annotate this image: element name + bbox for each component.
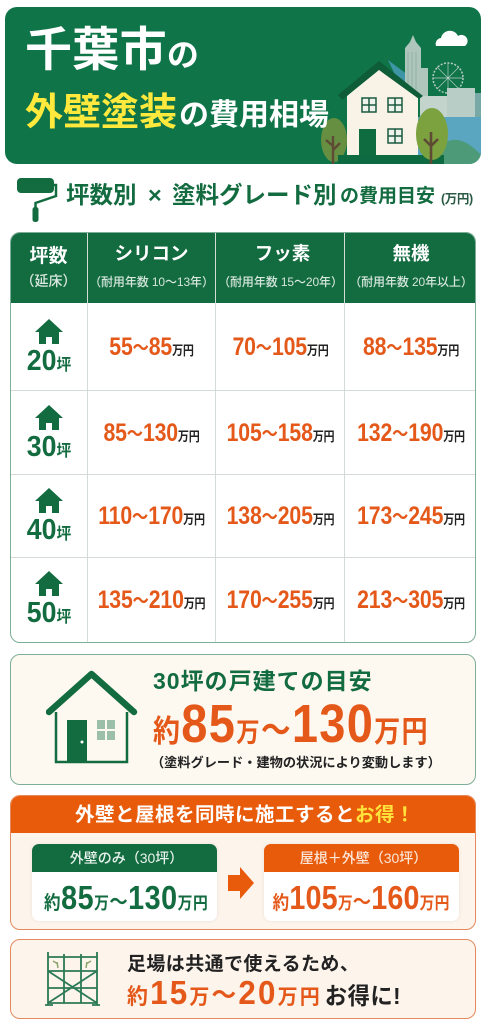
- icon: paint roller: [17, 178, 58, 222]
- card: 屋根+外壁: [264, 844, 459, 921]
- card label: [264, 844, 459, 872]
- column header: シリコン: シリコン: [114, 243, 188, 264]
- card label: [32, 844, 217, 872]
- prices: 50坪: 213～305万円: [357, 586, 465, 614]
- prices: 50坪: 135～210万円: [98, 586, 205, 614]
- section heading: (万円): [441, 192, 473, 206]
- prices: 20坪: 88～135万円: [363, 333, 459, 361]
- icon: house: [46, 670, 138, 764]
- column header: フッ素: [218, 243, 343, 289]
- column header: フッ素: フッ素: [255, 243, 310, 264]
- section heading: 塗料グレード別: [172, 182, 336, 208]
- scaffolding savings: 約15万～20万円お得に!: [127, 974, 401, 1011]
- prices: 40坪: 173～245万円: [357, 502, 465, 530]
- estimate note: （塗料グレード・建物の状況により変動します）: [151, 755, 441, 770]
- card price: 約105万～160万円: [273, 879, 450, 916]
- price table: [10, 232, 476, 643]
- prices: 50坪: [98, 586, 465, 614]
- prices: 40坪: [98, 502, 465, 530]
- prices: 30坪: [103, 419, 465, 447]
- section heading: [66, 182, 473, 208]
- prices: 30坪: 85～130万円: [103, 419, 200, 447]
- section heading: ×: [148, 182, 162, 208]
- prices: 40坪: 110～170万円: [98, 502, 205, 530]
- prices: 20坪: [109, 333, 459, 361]
- icon: scaffolding: [45, 952, 100, 1006]
- card label: 屋根＋外壁（30坪）: [300, 850, 427, 866]
- arrow: [228, 867, 254, 899]
- prices: 40坪: 138～205万円: [227, 502, 334, 530]
- prices: 20坪: 55～85万円: [109, 333, 194, 361]
- illustration: city, house and trees: [321, 30, 481, 164]
- column header: 無機: （耐用年数 20年以上）: [349, 275, 473, 289]
- column header: フッ素: （耐用年数 15～20年）: [218, 275, 343, 289]
- prices: 50坪: 170～255万円: [227, 586, 334, 614]
- section heading: の費用目安: [340, 186, 435, 207]
- prices: 30坪: 105～158万円: [227, 419, 334, 447]
- column header: シリコン: [89, 243, 214, 289]
- panel: scaffolding savings: [10, 939, 476, 1019]
- panel: bundled work savings: [10, 795, 476, 930]
- card: 外壁のみ: [32, 844, 217, 921]
- panel title: 外壁と屋根を同時に施工するとお得！: [75, 804, 415, 826]
- column header: シリコン: （耐用年数 10～13年）: [89, 275, 214, 289]
- section heading: 坪数別: [66, 182, 136, 208]
- estimate heading: 30坪の戸建ての目安: [153, 668, 373, 694]
- prices: 20坪: 70～105万円: [232, 333, 329, 361]
- column header: 坪数: 坪数: [29, 246, 68, 267]
- row label: 20坪: 20坪: [27, 345, 71, 377]
- column header: 無機: [349, 243, 473, 289]
- header banner: [5, 7, 481, 164]
- title: 千葉市の: 千葉市の: [25, 23, 199, 76]
- row label: 40坪: [27, 488, 71, 546]
- table header row: [11, 233, 477, 303]
- panel: 30坪 estimate: [10, 654, 476, 785]
- row label: 30坪: [27, 405, 71, 463]
- column header: 無機: 無機: [392, 243, 430, 264]
- scaffolding message: 足場は共通で使えるため、: [127, 954, 359, 975]
- column header: 坪数: [20, 246, 76, 289]
- row label: 40坪: 40坪: [27, 514, 71, 546]
- panel title bar: [9, 794, 479, 833]
- column header: 坪数: （延床）: [20, 273, 76, 289]
- card label: 外壁のみ（30坪）: [70, 850, 183, 866]
- row label: 50坪: 50坪: [27, 597, 71, 629]
- row label: 30坪: 30坪: [27, 431, 71, 463]
- row label: 20坪: [27, 319, 71, 377]
- prices: 30坪: 132～190万円: [357, 419, 465, 447]
- estimate price: 約85万～130万円: [153, 694, 429, 754]
- row label: 50坪: [27, 571, 71, 629]
- title: 外壁塗装の費用相場: 外壁塗装の費用相場: [25, 92, 329, 134]
- card price: 約85万～130万円: [44, 879, 208, 916]
